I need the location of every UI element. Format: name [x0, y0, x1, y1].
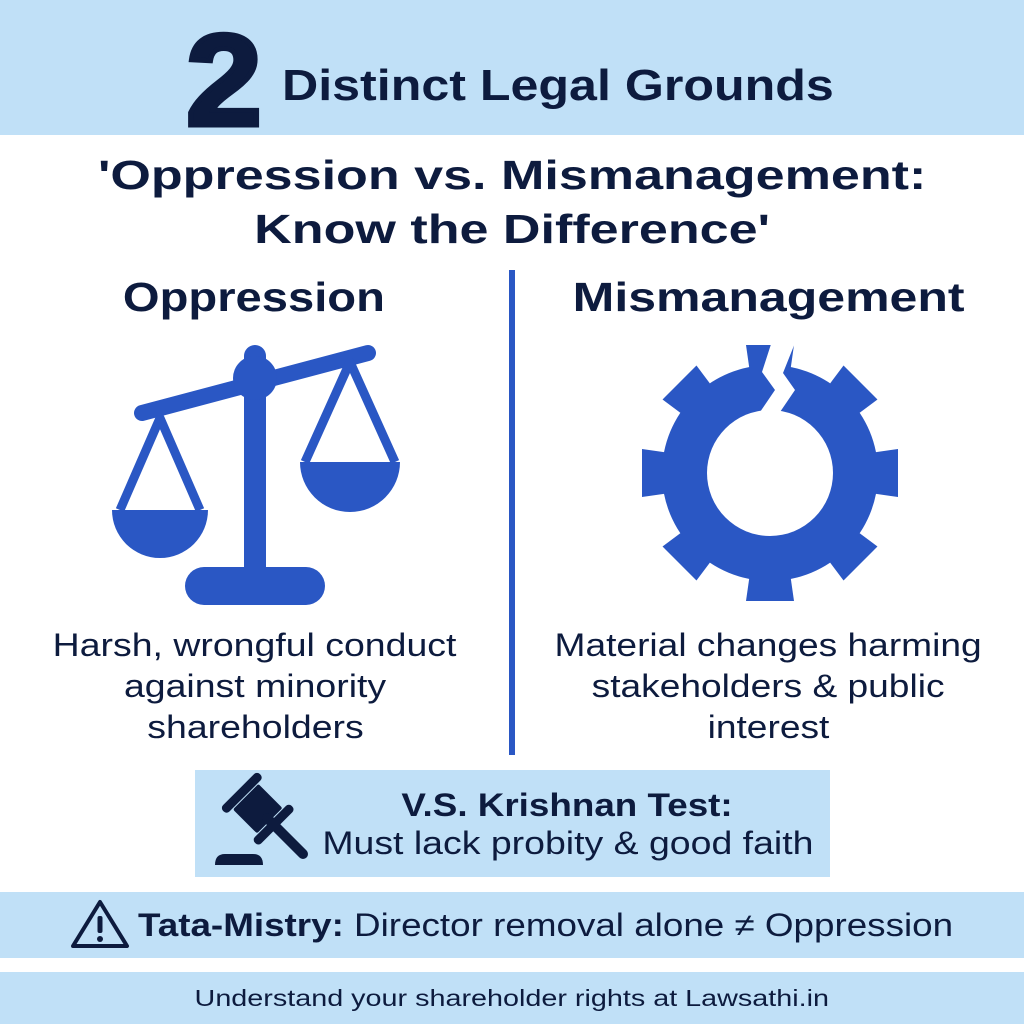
- icon: gavel: [215, 772, 308, 865]
- text: mismanagement description: stakeholders & public: [592, 668, 944, 704]
- subtitle: [98, 152, 926, 252]
- text: mismanagement description: Material changes harming: [554, 627, 982, 663]
- heading: mismanagement: Mismanagement: [573, 274, 965, 320]
- text: mismanagement description: interest: [707, 709, 829, 745]
- callout text: [322, 787, 813, 861]
- text: mismanagement description: [554, 627, 982, 745]
- callout text: Must lack probity & good faith: [322, 825, 813, 861]
- callout: V.S. Krishnan test: [195, 770, 830, 877]
- title number: 2: [186, 7, 262, 153]
- text: oppression description: shareholders: [147, 709, 363, 745]
- band: Tata-Mistry: [0, 892, 1024, 958]
- divider: [509, 270, 515, 755]
- footer: [0, 972, 1024, 1024]
- callout text: V.S. Krishnan Test:: [402, 787, 733, 823]
- heading: oppression: Oppression: [123, 274, 385, 320]
- header band: [0, 0, 1024, 135]
- text: oppression description: against minority: [124, 668, 386, 704]
- subtitle: Know the Difference': [254, 206, 770, 252]
- title text: Distinct Legal Grounds: [282, 61, 834, 110]
- text: oppression description: Harsh, wrongful conduct: [53, 627, 457, 663]
- text: oppression description: [53, 627, 457, 745]
- footer: Understand your shareholder rights at Lawsathi.in: [195, 985, 829, 1011]
- icon: warning: [71, 900, 130, 948]
- subtitle: 'Oppression vs. Mismanagement:: [98, 152, 926, 198]
- text: Tata-Mistry: Tata-Mistry: Director removal alone ≠ Oppression: [138, 907, 953, 943]
